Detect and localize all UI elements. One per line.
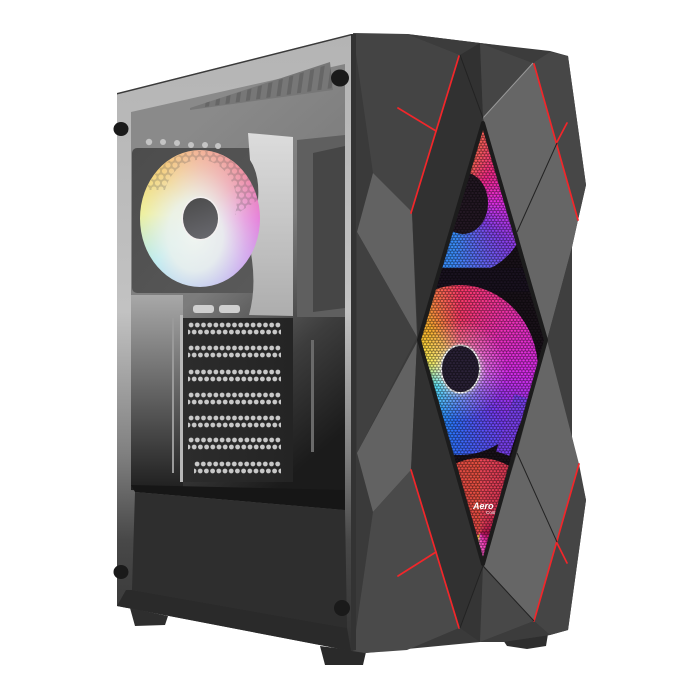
- logo: Cool: [486, 510, 495, 515]
- psu shroud: [132, 492, 347, 628]
- screws: [114, 70, 350, 616]
- red accent lines: [398, 56, 579, 628]
- product photo: PC tower case: [114, 33, 586, 665]
- side fan hub: [183, 198, 218, 239]
- facet seam lines: [460, 55, 557, 628]
- top fan glow: [442, 130, 516, 268]
- main fan hub: [442, 346, 479, 392]
- interior: [131, 64, 345, 510]
- side fan honeycomb grille: [148, 150, 258, 215]
- perforated hole rows: [188, 322, 281, 475]
- mesh overlay, accents and logo: [148, 55, 580, 629]
- dark band between fans: [442, 268, 490, 275]
- bottom rail: [117, 590, 351, 651]
- logo: Aero: [472, 501, 494, 511]
- bottom fan: [456, 458, 508, 556]
- fan frame: [132, 148, 260, 293]
- rear expansion area: [183, 318, 293, 482]
- top fan hub: [453, 173, 488, 234]
- mesh frame: [419, 123, 546, 564]
- left slim bar: [172, 318, 174, 473]
- right purple sliver: [496, 394, 528, 456]
- top slats: [190, 62, 333, 110]
- top edge of glass: [117, 34, 351, 94]
- side fan rainbow ring: [140, 150, 260, 287]
- mesh grille: [418, 122, 547, 566]
- main fan: [421, 285, 538, 455]
- motherboard tray cutout: [248, 133, 293, 316]
- right slim bar: [311, 340, 314, 452]
- front mesh fans: [421, 130, 544, 556]
- psu shroud top: [131, 485, 345, 510]
- slot rail: [180, 315, 183, 482]
- front panel base: [351, 34, 586, 653]
- cable cut-outs: [193, 305, 240, 313]
- front panel facets: [351, 33, 586, 653]
- feet: [130, 608, 548, 665]
- right column interior: [297, 135, 345, 317]
- top vent holes above fan: [146, 139, 221, 149]
- glass side panel: [117, 34, 351, 651]
- logo: [472, 501, 495, 515]
- interior left rail haze: [131, 295, 183, 490]
